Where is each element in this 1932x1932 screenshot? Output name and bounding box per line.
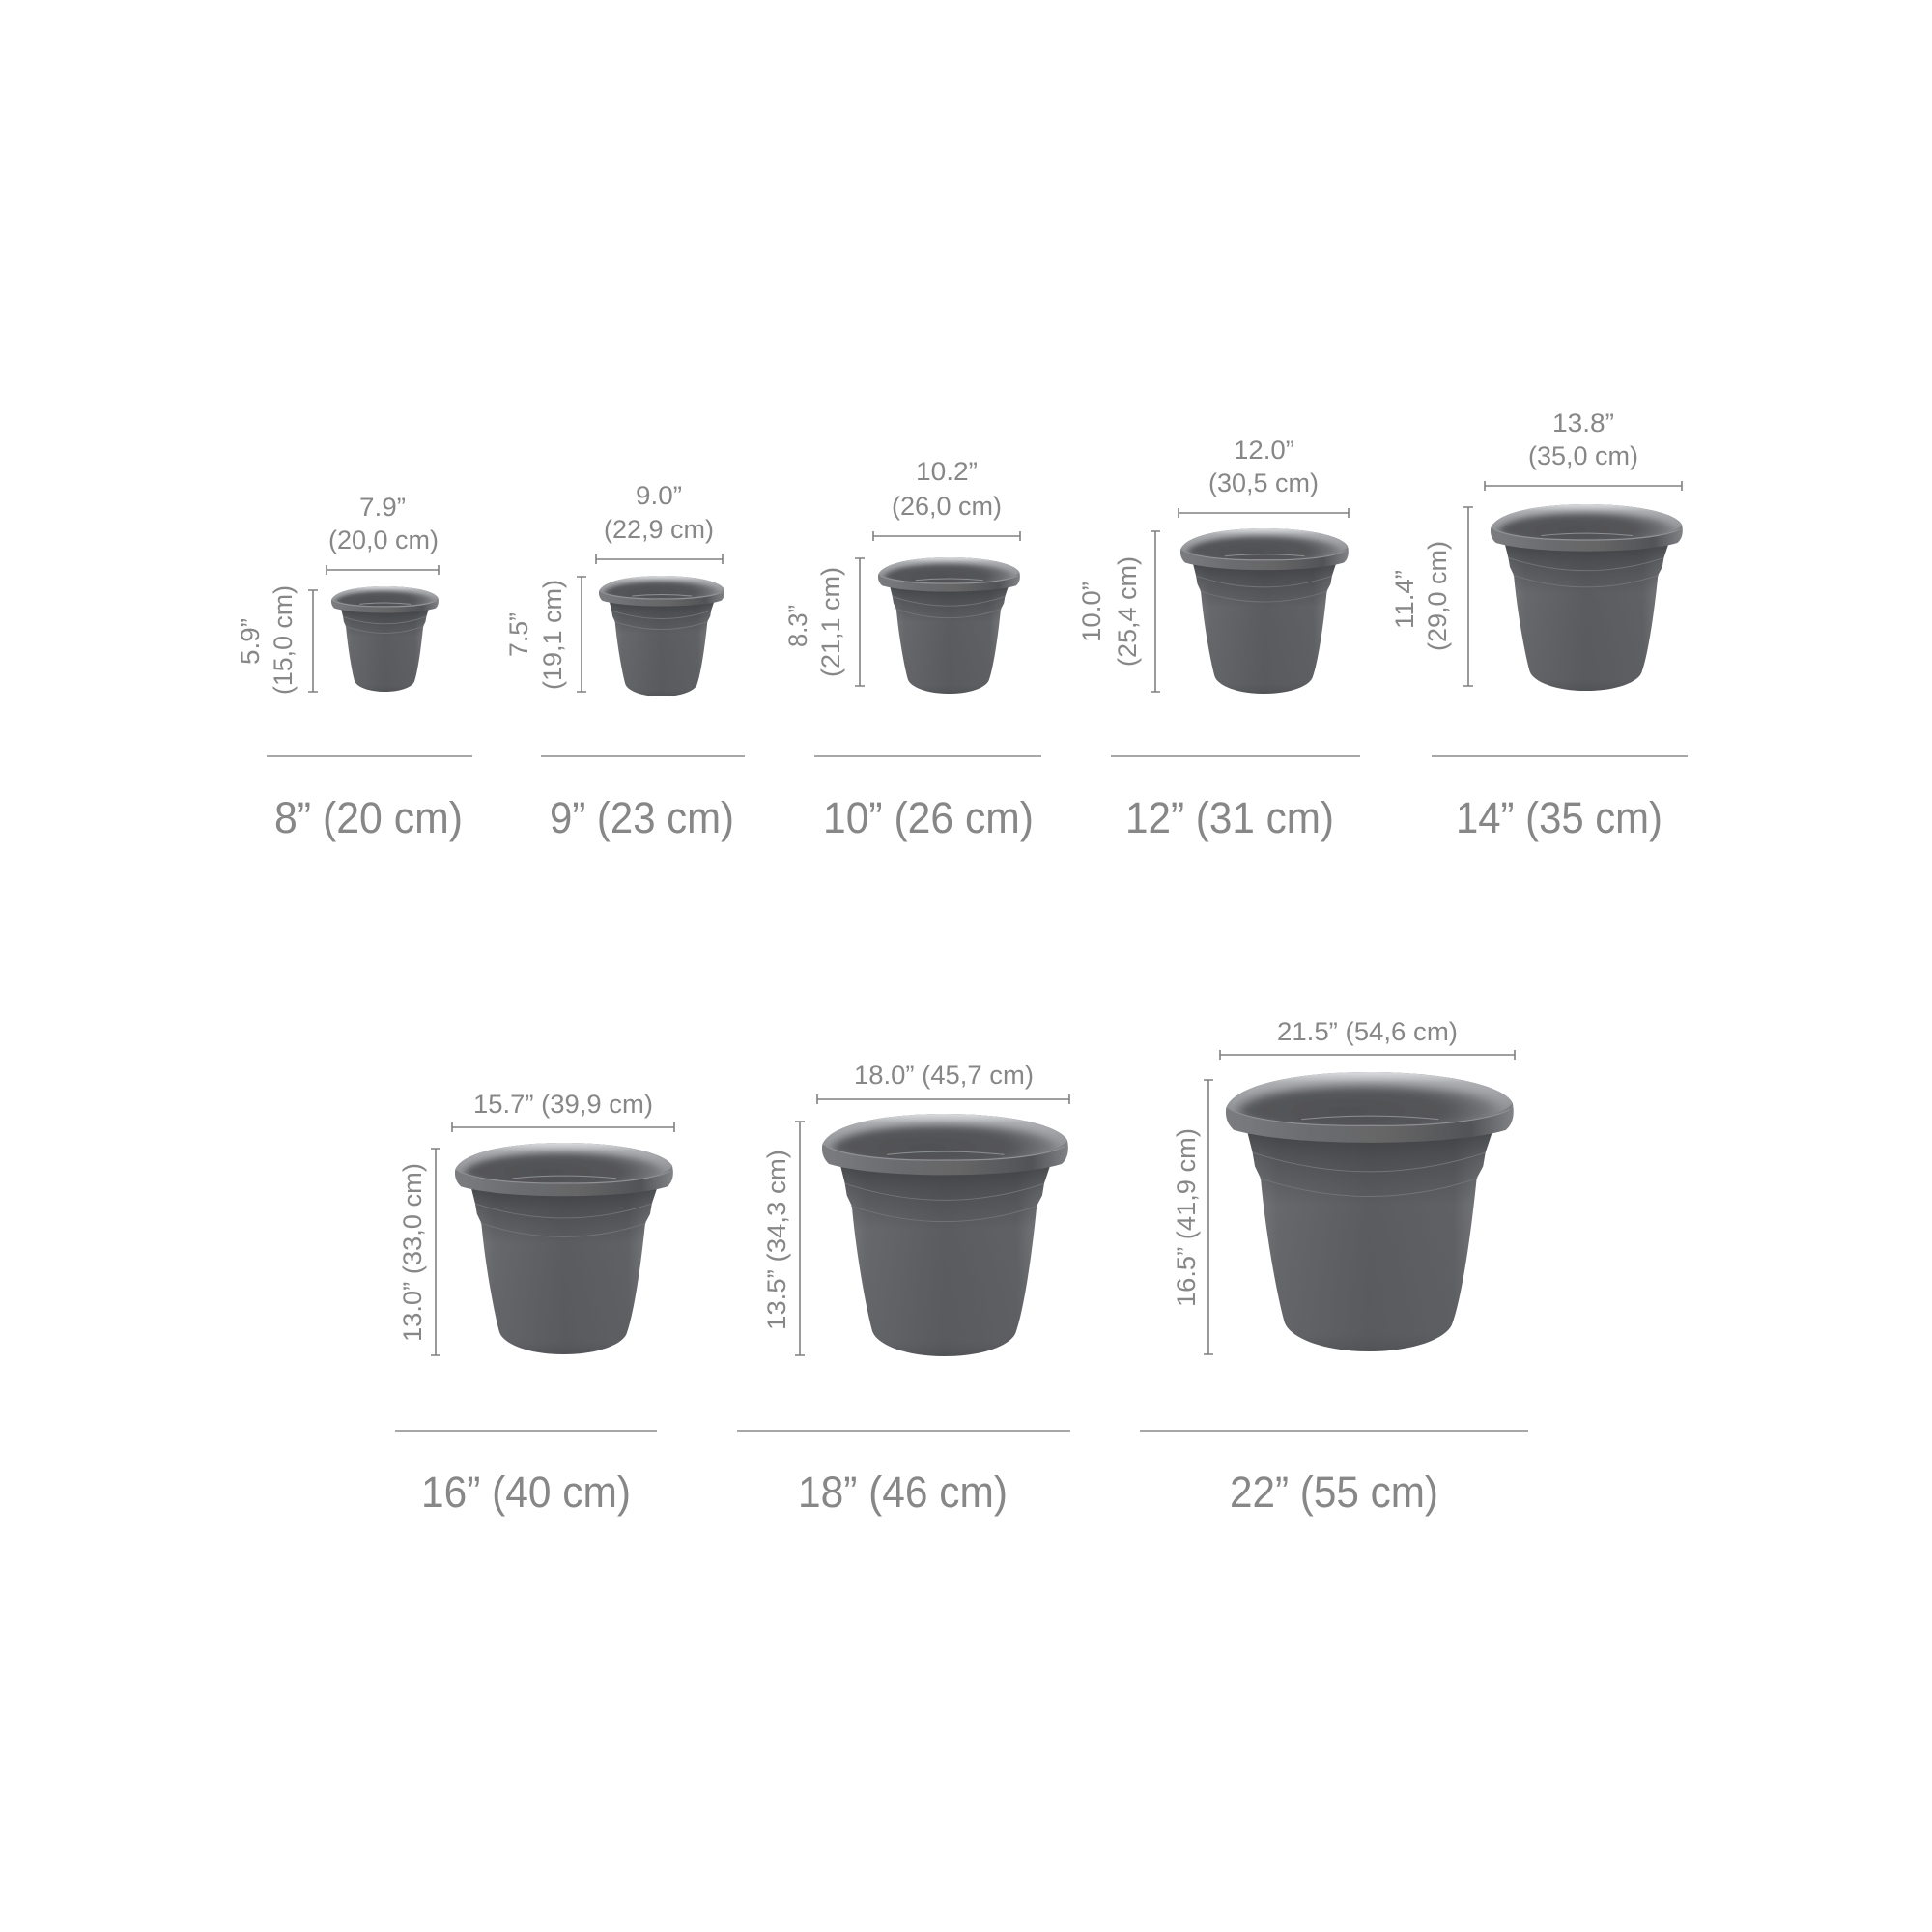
height dimension: 22 inch pot: [1172, 1080, 1213, 1354]
pot: 22 inch: [1226, 1072, 1514, 1351]
height dimension: 16 inch pot: [398, 1149, 440, 1355]
panel: 14 inch pot: [1390, 409, 1688, 842]
width dimension: 22 inch pot: [1220, 1017, 1515, 1060]
width dimension: 14 inch pot: [1485, 409, 1682, 491]
divider: 22 inch: [1140, 1430, 1528, 1432]
size label: 10 inch: 10” (26 cm): [823, 793, 1034, 842]
width dimension: 16 inch pot: [452, 1090, 674, 1132]
width dimension: 8 inch pot: [327, 493, 439, 575]
divider: 16 inch: [395, 1430, 657, 1432]
pot: 14 inch: [1491, 504, 1683, 691]
width dimension: 18 inch pot: [817, 1061, 1069, 1104]
height dimension: 14 inch pot: (29,0 cm): [1423, 541, 1452, 651]
height dimension: 12 inch pot: [1077, 531, 1160, 692]
divider: 18 inch: [737, 1430, 1070, 1432]
width dimension: 9 inch pot: (22,9 cm): [604, 515, 714, 544]
height dimension: 18 inch pot: [762, 1122, 805, 1355]
width dimension: 10 inch pot: 10.2”: [916, 457, 978, 486]
size label: 22 inch: 22” (55 cm): [1230, 1467, 1438, 1517]
height dimension: 14 inch pot: [1390, 507, 1473, 686]
height dimension: 8 inch pot: [236, 585, 318, 695]
width dimension: 9 inch pot: 9.0”: [636, 481, 682, 510]
width dimension: 18 inch pot: 18.0” (45,7 cm): [854, 1061, 1034, 1090]
width dimension: 12 inch pot: (30,5 cm): [1208, 469, 1319, 497]
width dimension: 14 inch pot: 13.8”: [1552, 409, 1614, 438]
size label: 12 inch: 12” (31 cm): [1125, 793, 1334, 842]
size label: 8 inch: 8” (20 cm): [274, 793, 463, 842]
width dimension: 16 inch pot: 15.7” (39,9 cm): [473, 1090, 653, 1119]
width dimension: 8 inch pot: (20,0 cm): [328, 526, 439, 554]
divider: 10 inch: [814, 755, 1041, 757]
size label: 16 inch: 16” (40 cm): [421, 1467, 631, 1517]
height dimension: 10 inch pot: 8.3”: [783, 605, 812, 647]
height dimension: 8 inch pot: 5.9”: [236, 618, 265, 665]
height dimension: 10 inch pot: [783, 558, 865, 686]
height dimension: 9 inch pot: [504, 577, 586, 692]
width dimension: 12 inch pot: [1179, 436, 1349, 518]
panel: 22 inch pot: [1140, 1017, 1528, 1517]
size label: 14 inch: 14” (35 cm): [1456, 793, 1662, 842]
height dimension: 8 inch pot: (15,0 cm): [269, 585, 298, 695]
width dimension: 10 inch pot: (26,0 cm): [892, 492, 1002, 521]
panel: 16 inch pot: [395, 1090, 674, 1517]
pot: 16 inch: [455, 1143, 673, 1354]
height dimension: 16 inch pot: 13.0” (33,0 cm): [398, 1163, 427, 1342]
panel: 8 inch pot: [236, 493, 472, 842]
width dimension: 10 inch pot: [873, 457, 1020, 541]
width dimension: 8 inch pot: 7.9”: [359, 493, 406, 522]
pot: 8 inch: [331, 586, 439, 692]
divider: 9 inch: [541, 755, 745, 757]
height dimension: 18 inch pot: 13.5” (34,3 cm): [762, 1150, 791, 1330]
size label: 9 inch: 9” (23 cm): [550, 793, 734, 842]
divider: 12 inch: [1111, 755, 1360, 757]
height dimension: 10 inch pot: (21,1 cm): [816, 567, 845, 677]
panel: 12 inch pot: [1077, 436, 1360, 842]
height dimension: 9 inch pot: 7.5”: [504, 612, 533, 657]
panel: 18 inch pot: [737, 1061, 1070, 1517]
width dimension: 14 inch pot: (35,0 cm): [1528, 441, 1638, 470]
width dimension: 9 inch pot: [596, 481, 723, 564]
panel: 10 inch pot: [783, 457, 1041, 842]
width dimension: 22 inch pot: 21.5” (54,6 cm): [1277, 1017, 1458, 1046]
panel: 9 inch pot: [504, 481, 745, 842]
height dimension: 14 inch pot: 11.4”: [1390, 570, 1419, 629]
pot: 10 inch: [878, 557, 1020, 694]
size label: 18 inch: 18” (46 cm): [798, 1467, 1008, 1517]
pot: 18 inch: [822, 1114, 1068, 1356]
width dimension: 12 inch pot: 12.0”: [1234, 436, 1294, 465]
divider: 8 inch: [267, 755, 472, 757]
pot: 12 inch: [1180, 528, 1349, 694]
height dimension: 12 inch pot: (25,4 cm): [1113, 556, 1142, 667]
height dimension: 9 inch pot: (19,1 cm): [538, 580, 567, 690]
pot: 9 inch: [599, 576, 724, 696]
divider: 14 inch: [1432, 755, 1688, 757]
height dimension: 12 inch pot: 10.0”: [1077, 582, 1106, 642]
height dimension: 22 inch pot: 16.5” (41,9 cm): [1172, 1128, 1201, 1307]
